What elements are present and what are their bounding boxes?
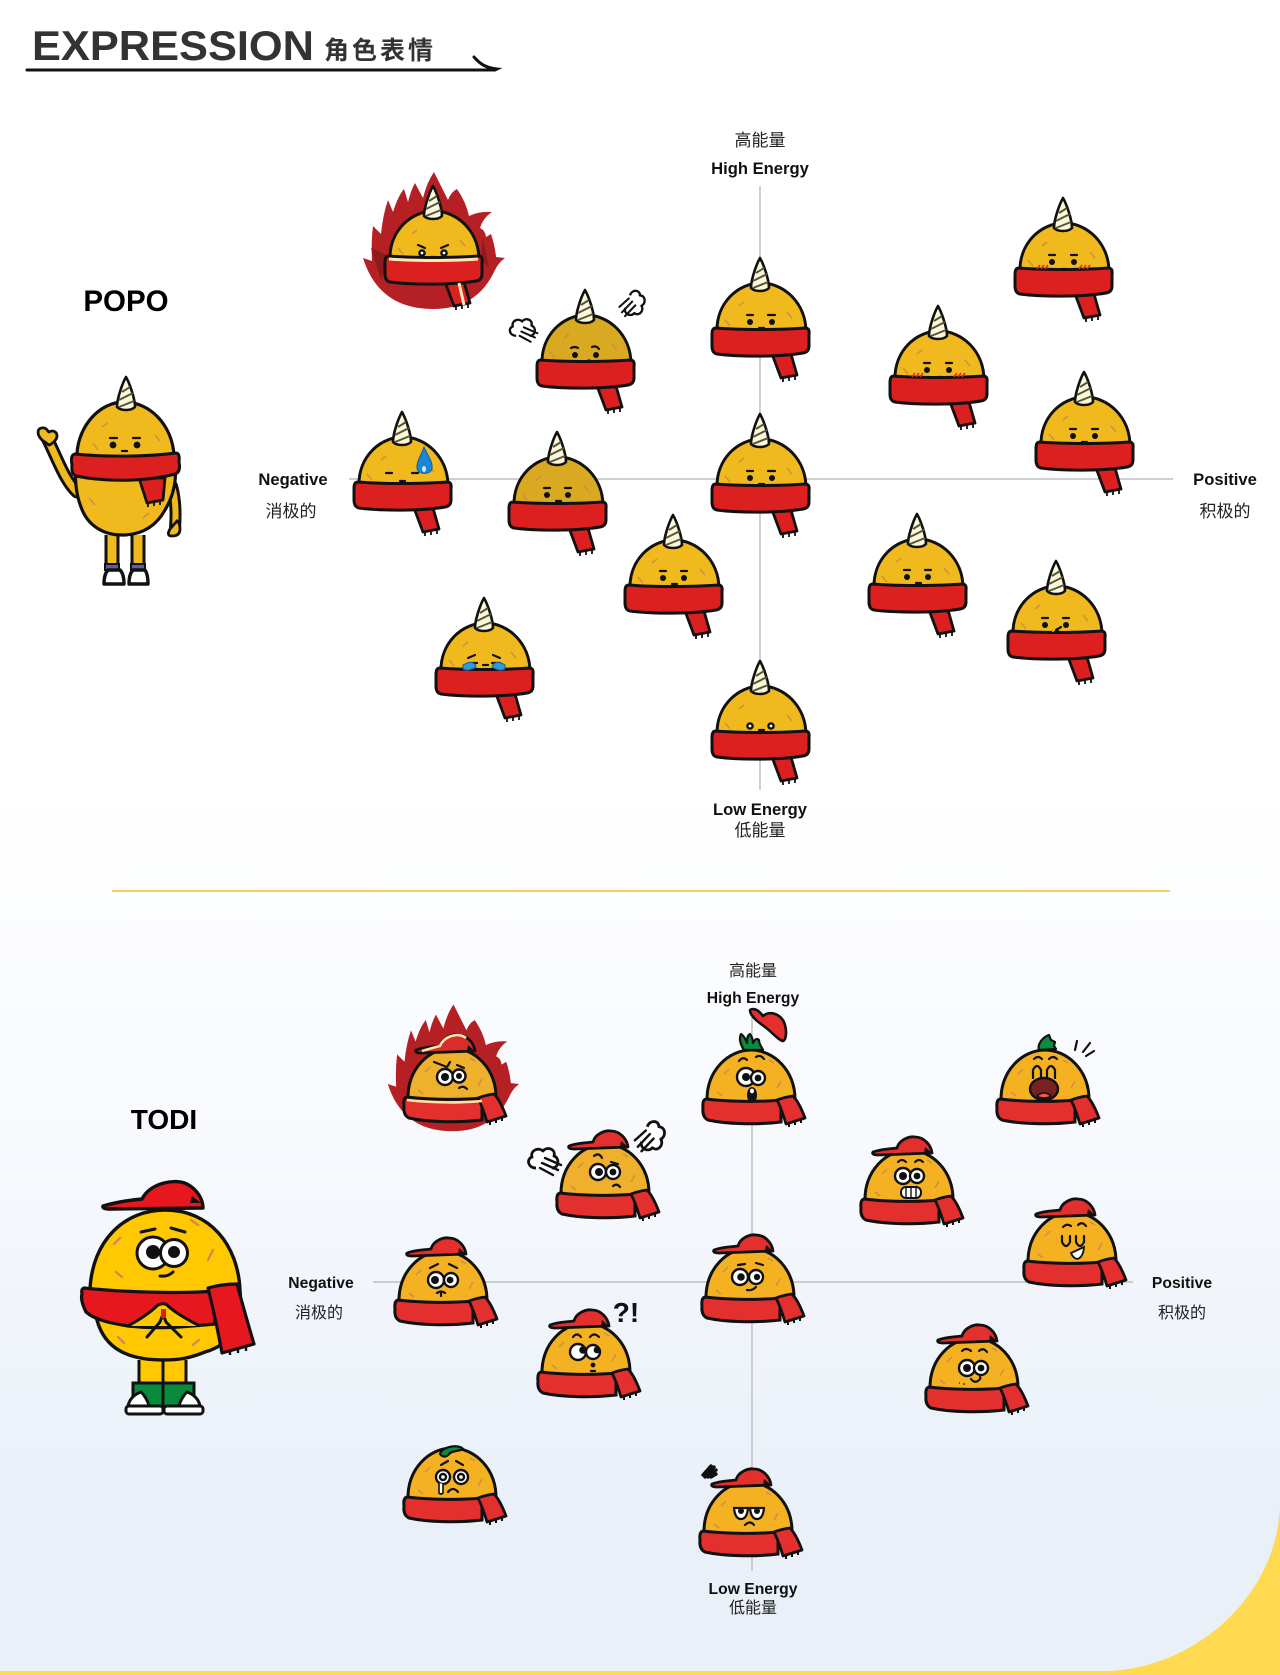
expression: crying [436,598,533,722]
label: low energy: Low Energy [709,1581,798,1598]
expression: shy top right [1015,198,1112,322]
expression: confused [538,1297,640,1400]
label: positive: 积极的 [1158,1304,1206,1322]
expression: grinning [861,1137,963,1227]
expression: surprised, hat flying [703,1009,805,1127]
expression: blushing [890,306,987,430]
label: low energy [713,800,808,840]
expression: content [869,514,966,638]
character: TODI full body [82,1182,254,1414]
expression: gloomy [509,432,606,556]
expression: huffing [529,1117,668,1221]
expression: playful [1008,561,1105,685]
label: high energy [707,962,799,1007]
title: EXPRESSION [32,22,314,69]
expression: calm [1036,372,1133,496]
heading: POPO: POPO [83,285,169,318]
yellow corner accent [0,1507,1280,1675]
label: low energy: Low Energy [713,800,808,819]
title [27,22,497,70]
label: positive: Positive [1193,470,1257,489]
expression: neutral centre [702,1235,804,1325]
expression: confused: ?! [613,1297,639,1328]
label: negative: Negative [288,1275,354,1292]
divider [112,890,1170,892]
expression: worried [395,1238,497,1328]
heading: TODI: TODI [131,1104,197,1135]
label: positive: Positive [1152,1275,1212,1292]
expression: mischievous [926,1325,1028,1415]
expression: laughing [997,1035,1099,1127]
label: high energy: High Energy [707,990,799,1007]
character: POPO full body [38,377,180,584]
label: positive [1152,1275,1212,1322]
axis lines [349,186,1173,790]
expression: tired [625,515,722,639]
chart: POPO expression quadrant [258,131,1257,840]
label: high energy: 高能量 [729,962,777,980]
title: 角色表情 [324,37,436,65]
expression: cheerful [1024,1199,1126,1289]
axis lines [373,1015,1133,1571]
label: high energy: High Energy [711,159,810,178]
label: low energy: 低能量 [734,821,786,840]
chart: TODI expression quadrant [288,962,1212,1617]
expression: alert [712,258,809,382]
label: low energy: 低能量 [729,1599,777,1617]
label: low energy [709,1581,798,1617]
label: negative: 消极的 [266,502,316,521]
label: negative [258,470,328,521]
label: negative [288,1275,354,1322]
label: high energy: 高能量 [734,131,786,150]
expression: raging in flames [363,172,505,310]
label: negative: 消极的 [295,1304,343,1322]
expression: sleepy with scribble [700,1466,802,1559]
label: positive [1193,470,1257,521]
expression: crying with leaf [404,1446,506,1525]
expression: sweating [354,412,451,536]
expression: sleepy [712,661,809,785]
expression: neutral centre [712,414,809,538]
expression: raging in flames [388,1004,519,1131]
expression: huffing [510,287,648,414]
label: high energy [711,131,810,178]
label: negative: Negative [258,470,328,489]
label: positive: 积极的 [1200,502,1250,521]
